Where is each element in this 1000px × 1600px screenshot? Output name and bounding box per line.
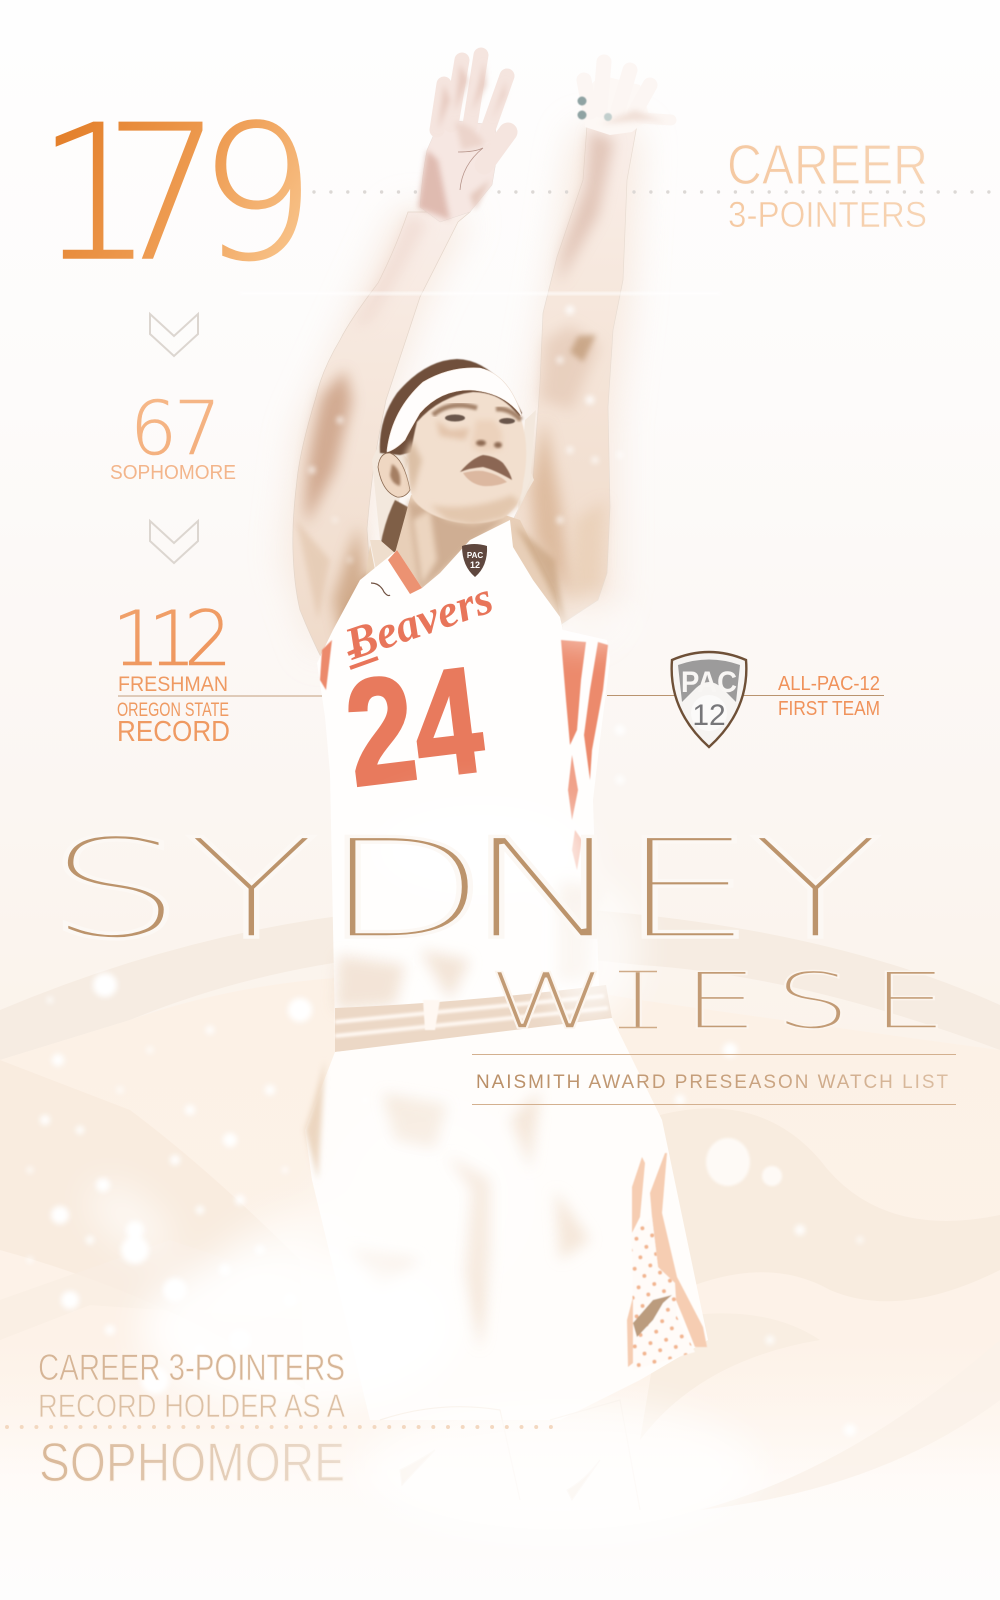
ear [378,453,410,497]
caption: career record as a sophomore: CAREER 3-POINTERS [38,1347,345,1388]
name: Sydney: SYDNEY [46,810,882,970]
jersey badge [462,544,487,577]
stat: 67 sophomore: 67 [130,386,221,472]
shoes [380,1400,640,1510]
jersey number: 24 [337,635,491,818]
label: oregon state record [117,700,230,748]
arrow chevron 1 [150,314,198,356]
label: career 3-pointers: CAREER [727,133,928,197]
jersey badge: PAC [467,551,483,560]
divider left [118,696,322,697]
dotted line top [314,190,992,194]
torso skin and neck [333,495,565,645]
right hand [578,62,671,135]
headband [387,368,522,452]
background swoosh logo [0,905,1000,1510]
award label: NAISMITH AWARD PRESEASON WATCH LIST [476,1072,950,1093]
jersey smudges [335,880,596,1010]
jersey wordmark: Beavers [338,572,499,670]
waistband [335,985,612,1052]
backdrop between head and arms [372,410,536,540]
left hand [418,55,508,222]
label: oregon state record: RECORD [117,716,230,748]
caption: career record as a sophomore: RECORD HOLDER AS A [38,1388,346,1424]
name: Wiese: WIESE [488,956,947,1046]
label: career 3-pointers [727,133,928,235]
icon: Pac-12 shield [672,652,746,747]
light streak [240,292,720,295]
left arm [293,212,470,665]
shorts side panel [627,1153,707,1370]
icon: Pac-12 shield: PAC [681,666,737,699]
face [378,392,526,525]
label: all-pac-12 first team: FIRST TEAM [778,698,880,720]
award rules [472,1054,956,1105]
white haze over body [76,613,760,1540]
jersey badge: 12 [470,560,480,570]
hair [380,359,522,455]
divider right [607,694,884,696]
figure halo [285,130,640,660]
stat: 67 sophomore [110,386,236,484]
label: all-pac-12 first team [778,673,880,720]
sparkles [27,306,863,1436]
stat: 112 freshman: 112 [112,594,232,683]
arrow chevron 2 [150,521,198,563]
dotted line bottom [7,1425,560,1429]
stat: 179 career 3-pointers: 179 [36,85,316,302]
stat: 112 freshman: FRESHMAN [118,673,228,696]
player: Sydney Wiese shooting [293,55,708,1510]
side stripes [320,640,608,870]
ponytail [380,500,408,556]
icon: Pac-12 shield: 12 [692,699,726,732]
label: career 3-pointers: 3-POINTERS [728,194,927,235]
label: all-pac-12 first team: ALL-PAC-12 [778,673,880,695]
right arm [513,125,637,625]
caption: career record as a sophomore [38,1347,346,1493]
jersey [317,520,610,1030]
label: oregon state record: OREGON STATE [117,700,229,721]
stat: 67 sophomore: SOPHOMORE [110,462,236,484]
caption: career record as a sophomore: SOPHOMORE [39,1431,345,1493]
shorts [305,1018,708,1420]
